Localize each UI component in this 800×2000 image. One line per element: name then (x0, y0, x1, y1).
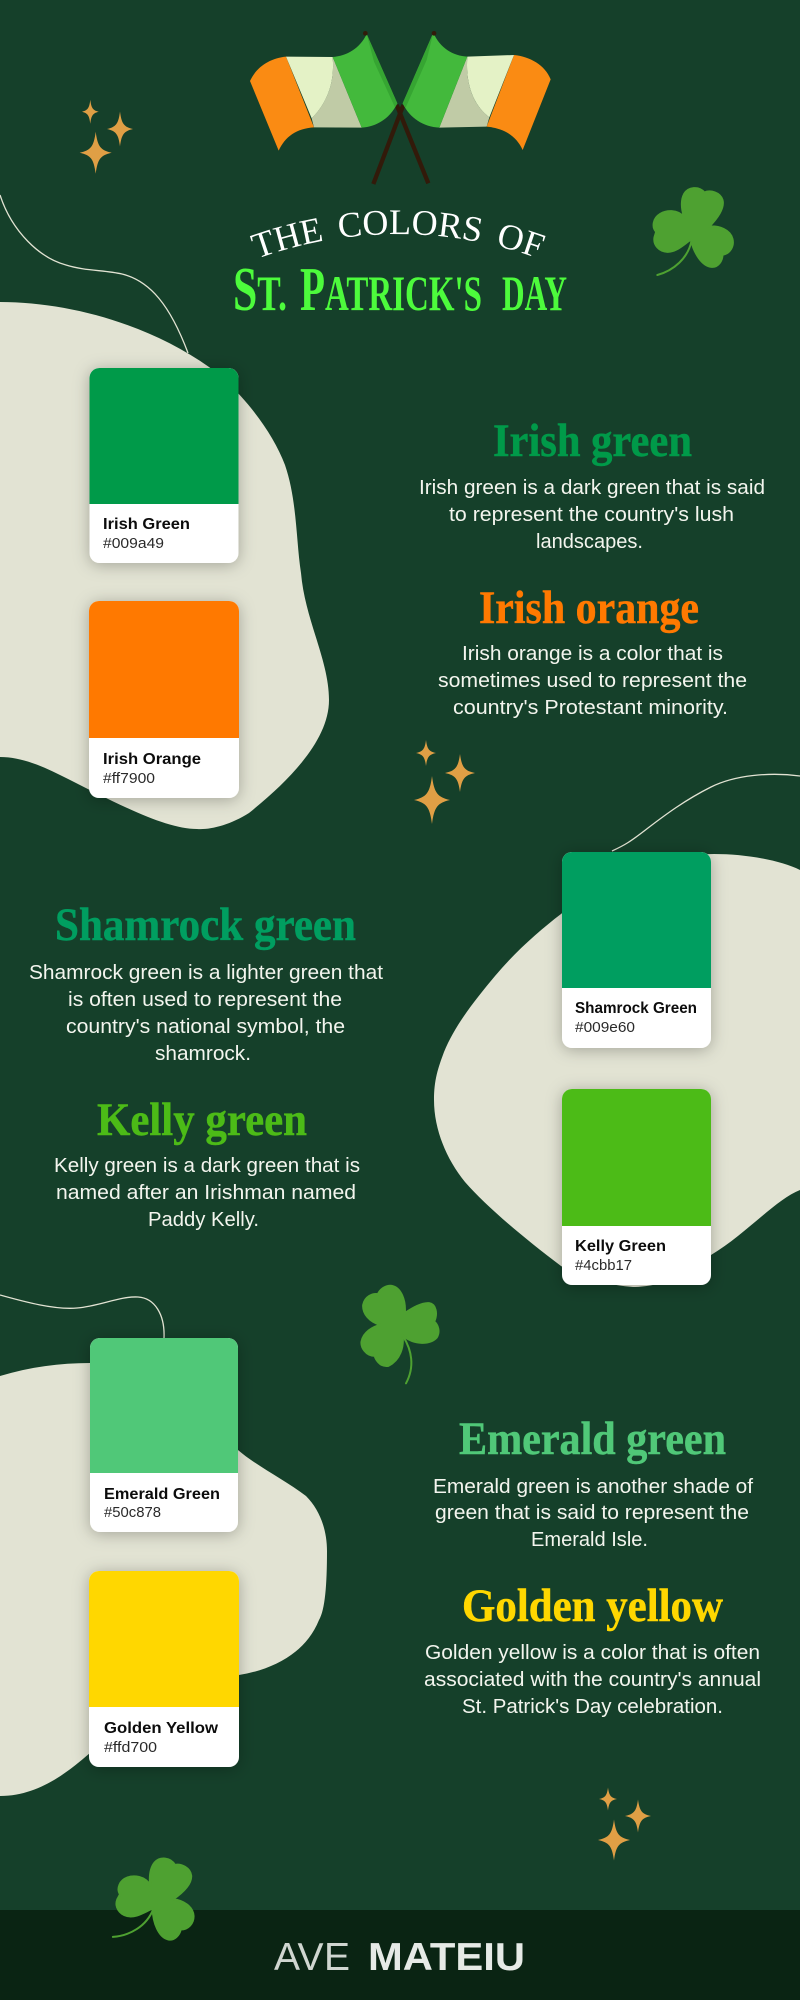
icon: shamrock bottom (109, 1851, 203, 1951)
swatch card: Irish Orange (89, 601, 239, 798)
text block: Irish green: landscapes. (536, 531, 643, 553)
text block: Golden yellow: Golden yellow (462, 1580, 723, 1632)
curved line: middle right (612, 774, 800, 851)
text block: Shamrock green (29, 899, 383, 1065)
text block: Kelly green: Kelly green (97, 1094, 307, 1146)
text block: Emerald green: Emerald green (459, 1413, 726, 1465)
title line: The Colors Of: THE COLORS OF (250, 210, 546, 257)
footer logo: AVE MATEIU (274, 1936, 525, 1979)
text block: Irish orange: sometimes used to represent the (438, 670, 747, 692)
swatch card: Irish Green: Irish Green (103, 516, 190, 533)
swatch card: Shamrock Green (562, 852, 711, 1048)
title line: St. Patrick's Day: ST. (233, 256, 287, 324)
text block: Emerald green (433, 1413, 753, 1551)
swatch card: Kelly Green: Kelly Green (575, 1238, 666, 1255)
sparkle group: lower right (598, 1788, 651, 1860)
text block: Irish green: to represent the country's lush (449, 504, 734, 526)
swatch card: Emerald Green: Emerald Green (104, 1486, 220, 1503)
swatch card: Golden Yellow: #ffd700 (104, 1740, 157, 1756)
text block: Kelly green: Kelly green is a dark green that is (54, 1155, 360, 1177)
background blob: middle right (434, 854, 800, 1287)
icon: crossed Irish flags (250, 31, 551, 184)
icon: shamrock top right (654, 188, 733, 275)
swatch card: Emerald Green: #50c878 (104, 1505, 161, 1521)
swatch card: Irish Orange: Irish Orange (103, 751, 201, 768)
swatch card: Irish Green: #009a49 (103, 536, 164, 552)
text block: Golden yellow: associated with the country's annual (424, 1669, 761, 1691)
curved line: top left (0, 195, 188, 353)
curved line: lower left (0, 1295, 164, 1338)
text block: Irish orange: country's Protestant minority. (453, 697, 728, 719)
swatch card: Golden Yellow (89, 1571, 239, 1767)
text block: Irish orange (438, 582, 747, 719)
text block: Kelly green (54, 1094, 360, 1231)
swatch card: Emerald Green (90, 1338, 238, 1532)
icon: shamrock middle (362, 1286, 438, 1383)
swatch card: Shamrock Green: #009e60 (575, 1020, 635, 1036)
swatch card: Irish Green (90, 368, 238, 563)
swatch card: Irish Orange: #ff7900 (103, 771, 155, 787)
swatch card: Shamrock Green: Shamrock Green (575, 1000, 697, 1017)
text block: Kelly green: Paddy Kelly. (148, 1209, 259, 1231)
text block: Irish green (419, 415, 765, 553)
background blob: upper left (0, 302, 329, 829)
text block: Shamrock green: shamrock. (155, 1043, 251, 1065)
text block: Golden yellow: Golden yellow is a color that is often (425, 1642, 760, 1664)
title line: St. Patrick's Day: DAY (502, 265, 567, 321)
text block: Kelly green: named after an Irishman named (56, 1182, 356, 1204)
sparkle group: middle (414, 740, 475, 824)
text block: Golden yellow (424, 1580, 761, 1718)
text block: Irish green: Irish green (493, 415, 692, 467)
text block: Golden yellow: St. Patrick's Day celebration. (462, 1696, 723, 1718)
text block: Emerald green: Emerald green is another shade of (433, 1476, 753, 1498)
text block: Shamrock green: is often used to represent the (68, 989, 342, 1011)
text block: Emerald green: Emerald Isle. (531, 1529, 648, 1551)
background blob: lower left (0, 1363, 327, 1796)
text block: Shamrock green: Shamrock green is a lighter green that (29, 962, 383, 984)
text block: Irish green: Irish green is a dark green that is said (419, 477, 765, 499)
swatch card: Kelly Green: #4cbb17 (575, 1258, 632, 1274)
text block: Shamrock green: Shamrock green (55, 899, 356, 951)
sparkle group: top left (80, 100, 133, 174)
swatch card: Golden Yellow: Golden Yellow (104, 1720, 219, 1737)
text block: Shamrock green: country's national symbol, the (66, 1016, 345, 1038)
text block: Irish orange: Irish orange is a color that is (462, 643, 723, 665)
text block: Irish orange: Irish orange (479, 582, 699, 634)
footer band (0, 1910, 800, 2000)
footer logo: AVE MATEIU: AVE (274, 1936, 350, 1979)
swatch card: Kelly Green (562, 1089, 711, 1285)
text block: Emerald green: green that is said to represent the (435, 1502, 749, 1524)
title line: St. Patrick's Day: PATRICK'S (300, 256, 482, 324)
footer logo: AVE MATEIU: MATEIU (368, 1936, 525, 1979)
